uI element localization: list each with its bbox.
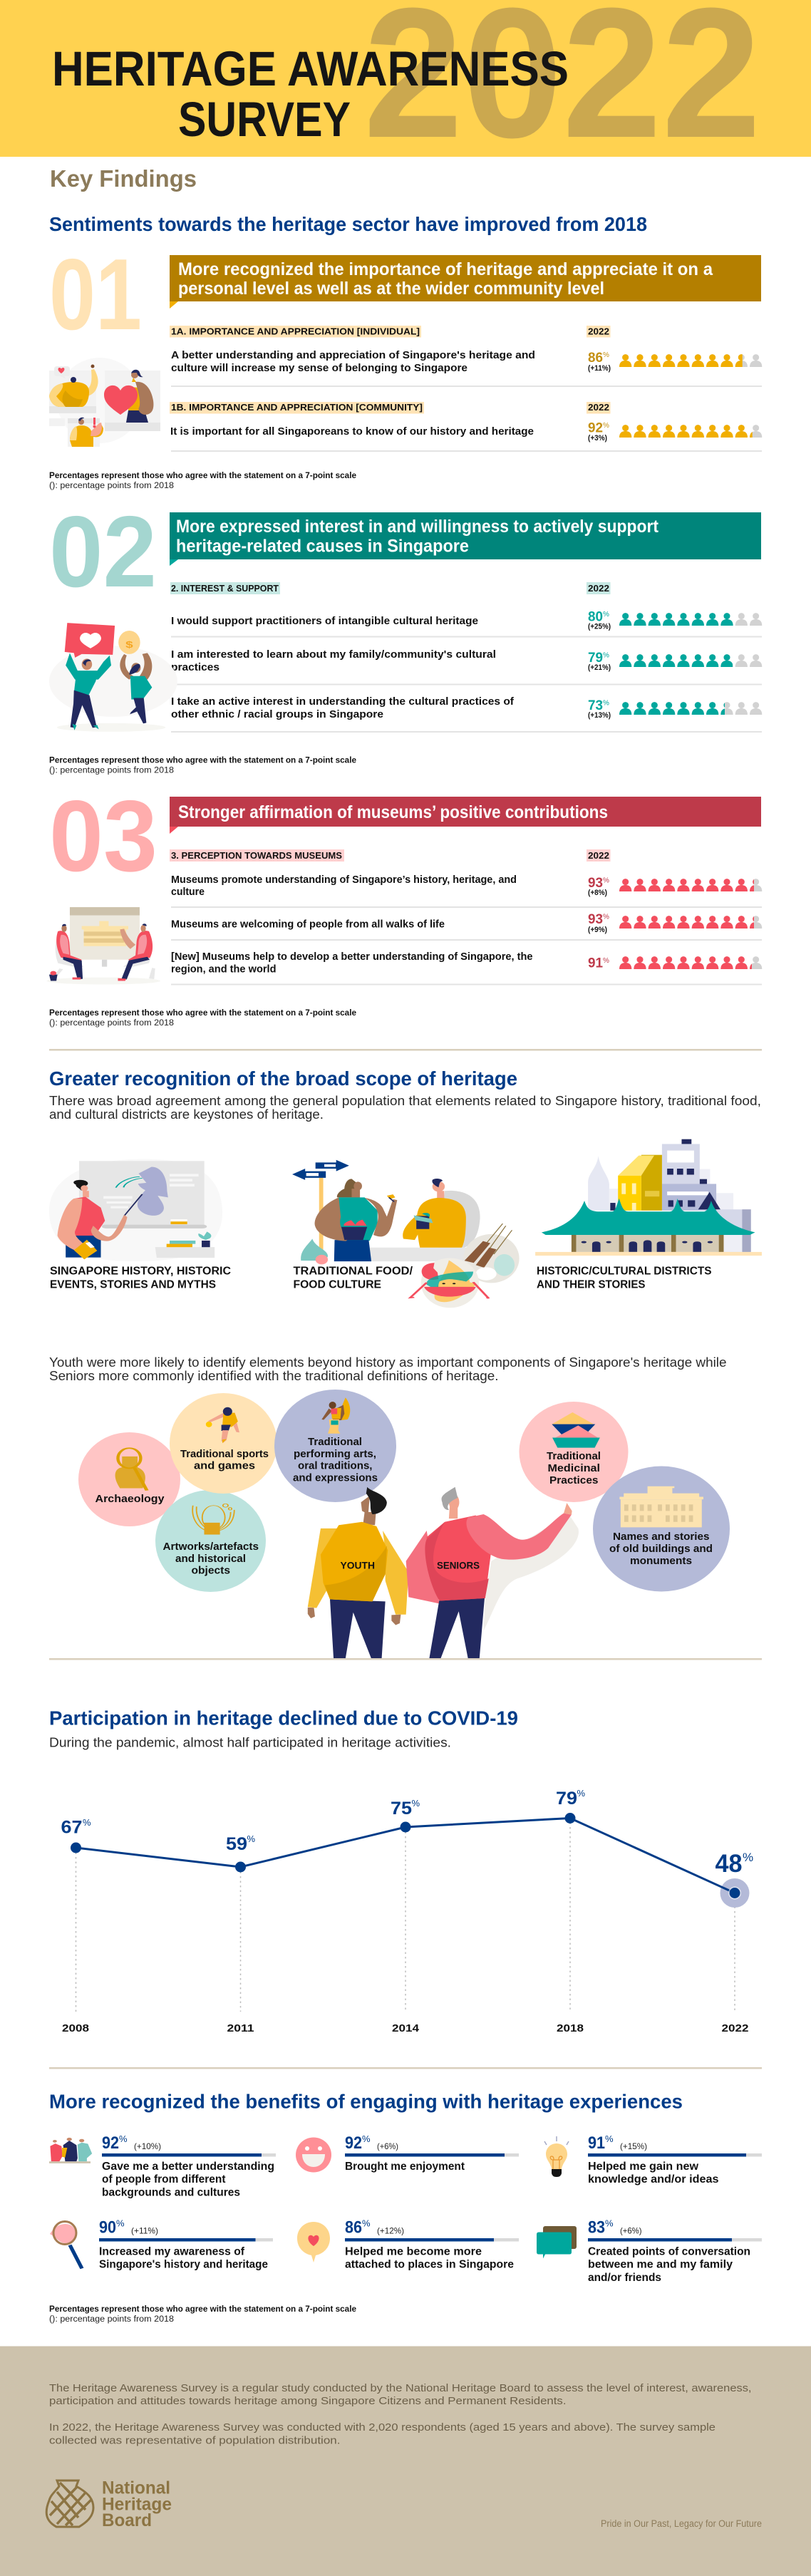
row 2-3: 73 [588,698,603,713]
benefit 5: % [362,2218,371,2229]
banner 01 [170,255,761,309]
benefit 5: attached to places in Singapore [345,2259,514,2270]
row 1A statement: % [603,351,609,359]
benefit 2: Brought me enjoyment [345,2161,465,2173]
benefit 6: 83 [588,2218,605,2238]
paragraph: youth and seniors [49,1355,727,1383]
icon: three people [49,2138,92,2163]
bubble: traditional medicinal practices [519,1402,629,1502]
row 2-1 [171,610,762,637]
tagline: Pride in Our Past, Legacy for Our Future [601,2518,762,2529]
title: HERITAGE AWARENESS [52,41,569,96]
row 3-3: % [603,957,609,965]
data labels: 75 [391,1799,412,1819]
benefit 4: % [116,2218,125,2229]
footnote: (): percentage points from 2018 [49,2315,174,2324]
panel: finding 02 [49,495,762,775]
row 2-1: % [603,611,609,619]
bubble: names and stories of old buildings: monuments [630,1556,692,1567]
label: youth: YOUTH [341,1559,375,1571]
numeral 02: 02 [49,495,157,609]
row 1A statement: 86 [588,351,603,366]
caption: history: SINGAPORE HISTORY, HISTORIC [50,1266,231,1277]
benefit 6: Created points of conversation [588,2246,750,2257]
benefit 2: 92 [345,2133,362,2153]
banner 02: heritage-related causes in Singapore [176,536,469,556]
data labels: 59 [226,1834,247,1854]
banner 02: More expressed interest in and willingness to actively support [176,517,659,537]
bubble: names and stories of old buildings [593,1467,730,1592]
row 3-1: % [603,876,609,885]
row 3-2: 93 [588,912,603,927]
data labels [61,1788,753,1878]
illustration: museum visitors [46,907,160,985]
section heading: benefits: More recognized the benefits of engaging with heritage experiences [49,2091,683,2112]
benefit 1: backgrounds and cultures [102,2186,240,2199]
illustration: youth figure [308,1487,408,1659]
bubble: performing arts: Traditional [308,1437,362,1448]
footnote: Percentages represent those who agree with the statement on a 7-point scale [49,1009,356,1018]
section heading: sentiments: Sentiments towards the heritage sector have improved from 2018 [49,213,647,235]
bubble: performing arts: oral traditions, [298,1461,372,1472]
icon: magnifying glass [50,2222,83,2268]
illustration: cultural districts [535,1139,762,1256]
icon: location pin with heart [297,2222,330,2262]
bubble: artworks: and historical [175,1553,246,1565]
bubble: performing arts [274,1390,396,1502]
benefit 6 [537,2218,762,2284]
row 2-2: (+21%) [588,663,611,672]
x axis years: 2014 [392,2022,420,2034]
footer panel [0,2346,811,2576]
caption: food [294,1266,413,1291]
subheading 1B: 2022 [588,402,609,413]
benefit 4: Increased my awareness of [99,2246,245,2257]
title: SURVEY [178,92,351,147]
footnote [49,472,356,490]
caption: history [50,1266,231,1291]
header banner [0,0,811,177]
logo: national heritage board: Heritage [102,2494,172,2514]
row 2-2: 79 [588,651,603,666]
x axis years: 2008 [62,2022,89,2034]
caption: food: TRADITIONAL FOOD/ [294,1266,413,1277]
line chart: participation over time [61,1788,753,2034]
title [52,41,569,147]
row 1A statement [171,350,762,387]
section heading: participation: Participation in heritage declined due to COVID-19 [49,1707,518,1729]
row 2-2 [171,649,762,686]
bubble: artworks: objects [191,1565,230,1576]
row 1B statement [170,420,762,452]
banner 01: personal level as well as at the wider community level [178,279,604,299]
row 1B statement: 92 [588,420,603,436]
benefit 5: (+12%) [377,2226,404,2236]
row 3-2 [171,912,762,941]
footnote: Percentages represent those who agree with the statement on a 7-point scale [49,2305,356,2314]
about text: participation and attitudes towards heritage among Singapore Citizens and Permanent Residents. [49,2396,566,2407]
subheading 3: 2022 [588,850,609,861]
about text: collected was representative of population distribution. [49,2436,340,2447]
x axis years [62,2022,748,2034]
row 1B statement: (+3%) [588,434,607,443]
benefit 2: % [362,2133,371,2144]
bubble: names and stories of old buildings: of old buildings and [609,1543,713,1555]
illustration: supporters with heart and coin: $ [125,640,133,650]
subheading 1B: 1B. IMPORTANCE AND APPRECIATION [COMMUNITY] [171,402,423,413]
x axis years: 2022 [721,2022,748,2034]
row 2-2: % [603,651,609,660]
subheading: pandemic: During the pandemic, almost half participated in heritage activities. [49,1736,451,1750]
bubble: performing arts: and expressions [293,1472,378,1484]
paragraph: youth and seniors: Youth were more likely to identify elements beyond history as important components of Singapore's heritage while [49,1355,727,1370]
subheading 1B [170,402,610,413]
illustration: people with heart [49,358,160,447]
benefit 3 [544,2133,762,2186]
bubble: artworks [155,1490,266,1592]
illustration: history teacher and merlion [49,1159,222,1261]
panel: finding 03 [46,780,762,1028]
paragraph: broad agreement: There was broad agreement among the general population that elements related to Singapore history, traditional food, [49,1094,761,1108]
row 3-1: culture [171,886,205,898]
panel: finding 01 [49,238,762,490]
benefit 6: and/or friends [588,2272,661,2284]
benefit 6: % [605,2218,614,2229]
about text: In 2022, the Heritage Awareness Survey was conducted with 2,020 respondents (aged 15 years and above). The survey sample [49,2422,716,2433]
data labels: % [412,1798,420,1809]
banner 03: Stronger affirmation of museums’ positive contributions [178,802,608,822]
benefit 1: % [119,2133,128,2144]
row 2-2: I am interested to learn about my family/community's cultural [171,649,496,661]
row 3-1 [171,874,762,908]
icon: light bulb [544,2136,569,2177]
row 2-3: % [603,700,609,707]
banner 03 [170,797,761,834]
row 2-1: I would support practitioners of intangible cultural heritage [171,616,478,627]
paragraph: broad agreement [49,1094,761,1122]
benefit 3: knowledge and/or ideas [588,2173,718,2186]
subheading 2: 2022 [588,583,609,594]
data labels: 67 [61,1817,83,1837]
row 3-3: 91 [588,956,603,971]
logo: national heritage board: Board [102,2510,152,2530]
x axis years: 2018 [557,2022,584,2034]
row 3-2: % [603,914,609,921]
footnote [49,1009,356,1028]
data labels: % [577,1788,586,1799]
benefit 4 [50,2218,273,2270]
footnote: (): percentage points from 2018 [49,767,174,775]
subheading 2: 2. INTEREST & SUPPORT [171,583,279,594]
row 3-1: (+8%) [588,889,607,897]
row 1B statement: It is important for all Singaporeans to know of our history and heritage [170,426,534,438]
footnote: Percentages represent those who agree with the statement on a 7-point scale [49,757,356,765]
key findings heading: Key Findings [50,165,197,192]
benefit 5: 86 [345,2218,362,2238]
data labels: % [83,1817,91,1828]
bubble: traditional medicinal practices: Traditional [547,1451,601,1462]
illustration: supporters with heart and coin [49,623,177,732]
data labels: 48 [716,1850,743,1878]
bubble: performing arts: performing arts, [294,1449,376,1460]
benefit 4: (+11%) [131,2226,158,2236]
row 3-2: (+9%) [588,926,607,934]
icon: chat bubbles [537,2226,577,2259]
x axis years: 2011 [227,2022,254,2034]
bubble: artworks: Artworks/artefacts [162,1541,259,1553]
row 3-3 [171,951,762,985]
illustration: traditional food [292,1160,520,1308]
bubble: archaeology [78,1432,180,1526]
banner 02 [170,512,761,566]
numeral 03: 03 [49,780,157,893]
illustration: seniors figure [406,1487,579,1659]
caption: food: FOOD CULTURE [294,1278,381,1291]
benefit 2 [296,2133,519,2173]
row 1A statement: A better understanding and appreciation of Singapore's heritage and [171,350,535,361]
about text [49,2383,751,2447]
benefit 5 [297,2218,519,2270]
row 2-3 [171,696,762,733]
benefit 6: (+6%) [620,2226,642,2236]
banner 01: More recognized the importance of heritage and appreciate it on a [178,259,713,279]
subheading 1A: 2022 [588,326,609,336]
logo: national heritage board: National [102,2478,170,2498]
benefit 5: Helped me become more [345,2246,482,2257]
label: seniors: SENIORS [437,1559,480,1571]
caption: districts: HISTORIC/CULTURAL DISTRICTS [537,1266,712,1277]
data labels: % [247,1833,255,1844]
subheading 1A [170,326,610,338]
row 2-1: (+25%) [588,623,611,631]
about text: The Heritage Awareness Survey is a regular study conducted by the National Heritage Board to assess the level of interest, awareness, [49,2383,751,2394]
benefit 1 [49,2133,276,2199]
row 2-3: (+13%) [588,711,611,720]
bubble: names and stories of old buildings: Names and stories [613,1531,710,1543]
benefit 3: % [605,2133,614,2144]
footnote [49,757,356,775]
bubble: traditional sports: Traditional sports [180,1449,269,1460]
row 2-2: practices [171,662,219,673]
row 2-3: I take an active interest in understanding the cultural practices of [171,696,514,708]
row 1A statement: (+11%) [588,364,611,373]
bubble: traditional medicinal practices: Medicinal [547,1463,600,1474]
footnote: Percentages represent those who agree with the statement on a 7-point scale [49,472,356,480]
benefit 1: of people from different [102,2173,225,2186]
row 1A statement: culture will increase my sense of belonging to Singapore [171,363,468,374]
benefit 4: 90 [99,2218,116,2238]
row 3-3: region, and the world [171,963,277,975]
benefit 1: Gave me a better understanding [102,2161,274,2173]
numeral 01: 01 [49,238,142,351]
row 3-3: [New] Museums help to develop a better understanding of Singapore, the [171,951,533,963]
paragraph: broad agreement: and cultural districts are keystones of heritage. [49,1107,324,1122]
row 1B statement: % [603,422,609,430]
subheading 2 [170,582,610,594]
benefit 6: between me and my family [588,2259,733,2270]
row 3-1: 93 [588,876,603,891]
row 2-1: 80 [588,610,603,624]
bubble: traditional sports: and games [194,1461,255,1472]
row 3-2: Museums are welcoming of people from all walks of life [171,919,445,931]
icon: smiling face [296,2138,331,2172]
paragraph: youth and seniors: Seniors more commonly identified with the traditional definitions of heritage. [49,1369,499,1383]
subheading 3 [170,849,610,862]
benefit 1: 92 [102,2133,119,2153]
data labels: 79 [556,1789,577,1809]
section heading: broad scope: Greater recognition of the broad scope of heritage [49,1067,517,1090]
subheading 1A: 1A. IMPORTANCE AND APPRECIATION [INDIVIDUAL] [171,326,420,336]
bubble: traditional medicinal practices: Practices [549,1475,599,1486]
footnote: (): percentage points from 2018 [49,1019,174,1028]
benefit 1: (+10%) [134,2141,161,2151]
bubble: archaeology: Archaeology [95,1494,164,1505]
caption: districts [537,1266,712,1291]
row 3-1: Museums promote understanding of Singapore’s history, heritage, and [171,874,517,886]
footnote: (): percentage points from 2018 [49,482,174,490]
caption: history: EVENTS, STORIES AND MYTHS [50,1278,216,1291]
benefit 2: (+6%) [377,2141,398,2151]
data labels: % [743,1851,753,1864]
caption: districts: AND THEIR STORIES [537,1278,646,1291]
footnote [49,2305,356,2324]
row 2-3: other ethnic / racial groups in Singapore [171,709,383,720]
benefit 3: (+15%) [620,2141,647,2151]
bubble: traditional sports [170,1393,277,1494]
benefit 3: 91 [588,2133,605,2153]
benefit 4: Singapore's history and heritage [99,2259,268,2270]
subheading 3: 3. PERCEPTION TOWARDS MUSEUMS [171,850,342,861]
benefit 3: Helped me gain new [588,2161,699,2173]
logo: national heritage board [46,2478,172,2530]
